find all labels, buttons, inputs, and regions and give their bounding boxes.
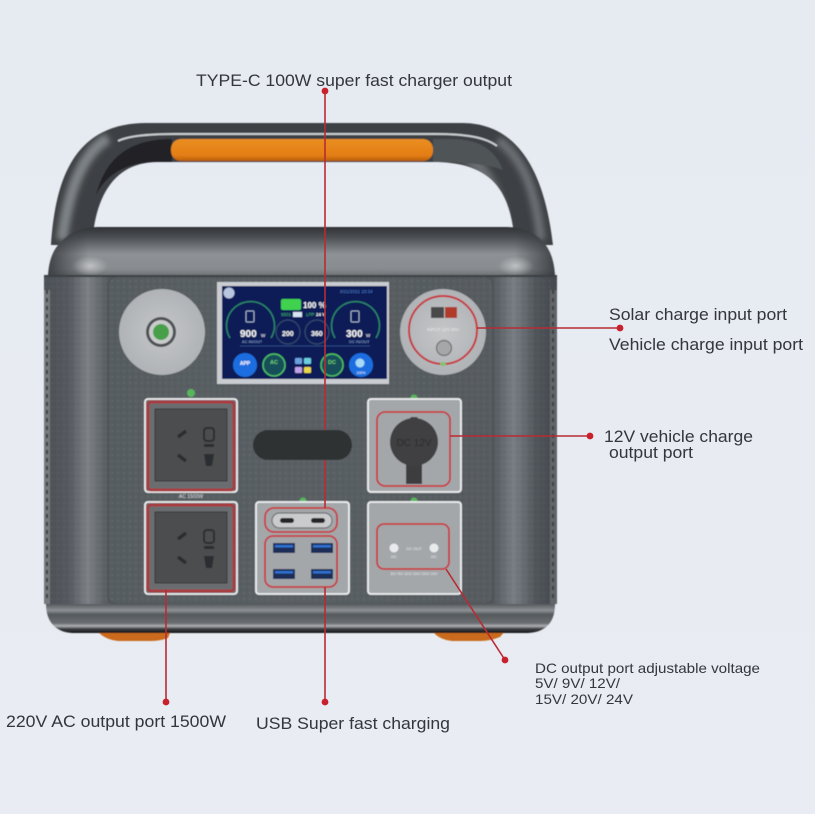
handle recess <box>253 430 352 460</box>
label: AC output: 220V AC output port 1500W <box>6 712 226 731</box>
LCD screen: 100% <box>357 371 365 375</box>
LCD screen: 300 <box>346 329 363 340</box>
power button disc <box>119 289 205 375</box>
status LEDs <box>187 389 418 504</box>
LCD screen: 9501 <box>281 312 292 317</box>
callout dots <box>163 88 623 705</box>
small gauges <box>276 320 300 344</box>
LCD screen: W <box>366 333 371 338</box>
USB panel <box>256 502 349 594</box>
LCD screen: 900 <box>240 329 257 340</box>
LCD screen: DC <box>328 360 336 366</box>
LCD screen: 200 <box>282 331 294 338</box>
left gauge <box>226 302 274 338</box>
top lid <box>48 227 555 276</box>
LCD screen: 24 V <box>316 312 325 317</box>
DC output panel: DC <box>431 554 437 559</box>
callout lines <box>166 91 620 702</box>
body <box>44 275 557 604</box>
app buttons <box>233 353 257 377</box>
label: 12V output <box>604 428 753 462</box>
LCD screen: AC IN/OUT <box>242 339 263 344</box>
AC socket top <box>145 399 237 492</box>
LCD screen: 360 <box>311 331 323 338</box>
LCD screen: W <box>261 333 266 338</box>
power station product <box>44 123 557 641</box>
bottom base <box>46 604 555 633</box>
LCD screen: AC <box>270 360 278 366</box>
type-C ports <box>265 508 337 532</box>
label: type-C output: TYPE-C 100W super fast charger output <box>196 71 512 90</box>
LCD screen: DC IN/OUT <box>349 339 370 344</box>
label: solar input: Solar charge input port <box>609 306 787 324</box>
LCD screen: LFP <box>306 312 314 317</box>
solar and vehicle input disc <box>400 289 486 375</box>
LCD screen: 100 % <box>303 301 326 310</box>
DC output panel: DC OUT <box>406 546 422 551</box>
orange grip <box>171 139 433 161</box>
USB-A ports <box>265 536 337 587</box>
12V panel: DC 12V <box>396 438 432 449</box>
DC output panel <box>368 502 461 594</box>
label: 12V output: output port <box>609 444 693 462</box>
label: 12V output: 12V vehicle charge <box>604 428 753 446</box>
label: DC output: 15V/ 20V/ 24V <box>535 691 634 707</box>
fan icon <box>224 288 234 298</box>
12V panel <box>368 399 461 492</box>
solar and vehicle input disc: INPUT 12V-30V <box>427 327 459 332</box>
label: vehicle input: Vehicle charge input port <box>609 336 803 354</box>
label: DC output: 5V/ 9V/ 12V/ <box>535 675 620 691</box>
AC socket bottom <box>145 502 237 594</box>
front panel outline <box>108 277 493 604</box>
rubber feet <box>98 630 506 641</box>
right gauge <box>331 302 380 338</box>
LCD screen: 8/21/2021 10:34 <box>340 289 373 294</box>
DC output panel: 5V/ 9V/ 12V/ 15V/ 20V/ 24V <box>391 572 438 576</box>
label: DC output <box>535 660 760 707</box>
carry handle <box>51 123 553 245</box>
LCD screen: APP <box>240 361 251 367</box>
battery indicator <box>281 299 301 310</box>
label: USB: USB Super fast charging <box>256 714 450 733</box>
DC output panel: DC <box>391 554 397 559</box>
label: DC output: DC output port adjustable voltage <box>535 660 760 676</box>
LCD screen <box>217 282 389 384</box>
AC label: AC 1500W <box>179 494 203 500</box>
